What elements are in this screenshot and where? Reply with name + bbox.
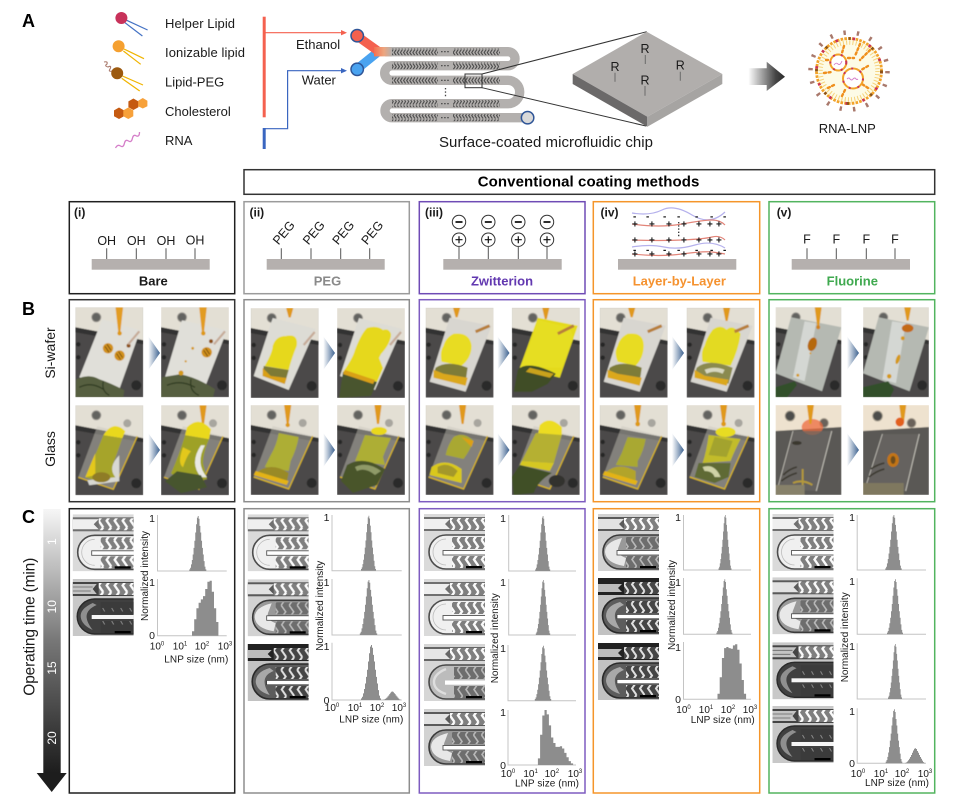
photo: PEG Si-wafer after <box>337 308 405 398</box>
axis numbers and labels: 2 <box>381 703 385 709</box>
panel letter B: B <box>22 299 35 319</box>
water label: Water <box>302 72 337 87</box>
axis numbers and labels <box>315 512 407 726</box>
axis numbers and labels: Normalized intensity <box>667 560 678 650</box>
axis numbers and labels: 1 <box>149 513 155 525</box>
photo: LbL Si-wafer before <box>600 308 668 398</box>
histogram 10 min <box>509 579 576 635</box>
photo: LbL Si-wafer after <box>687 308 755 398</box>
panel: v fluorine schematic: (v) <box>777 206 791 220</box>
component names: Cholesterol <box>165 104 231 119</box>
histogram 1 min <box>332 515 402 571</box>
axis numbers and labels: 10 <box>699 705 710 716</box>
operating time arrow: 1 <box>45 538 59 545</box>
panel: ii PEG schematic: PEG <box>300 218 328 247</box>
axis numbers and labels: 0 <box>324 695 330 707</box>
outlet <box>521 112 534 124</box>
operating time arrow: 10 <box>45 600 59 613</box>
microfluidic chip <box>351 30 534 124</box>
lipid components legend <box>104 12 245 148</box>
axis numbers and labels: 0 <box>336 703 340 709</box>
axis numbers and labels: 1 <box>849 641 855 653</box>
axis numbers and labels: 1 <box>675 512 681 524</box>
axis numbers and labels: Normalized intensity <box>840 592 851 682</box>
axis numbers and labels: 1 <box>849 706 855 718</box>
icon: ionizable lipid <box>113 40 144 64</box>
photo: PEG glass before <box>251 405 319 495</box>
photo: fluorine glass after <box>863 405 929 495</box>
axis numbers and labels: 1 <box>885 769 889 775</box>
photo: PEG Si-wafer before <box>251 308 319 398</box>
histogram 1 min <box>857 515 926 570</box>
header: conventional coating methods: Conventional coating methods <box>478 174 699 191</box>
ethanol label: Ethanol <box>296 37 340 52</box>
operating time arrow: 15 <box>45 661 59 675</box>
photo: fluorine Si-wafer after <box>863 307 929 397</box>
panel: v fluorine schematic: F <box>803 232 811 246</box>
arrow: before to after <box>672 336 684 467</box>
histogram 15 min <box>857 643 926 699</box>
panel: v fluorine schematic: F <box>832 232 840 246</box>
axis numbers and labels <box>667 512 758 726</box>
axis numbers and labels: 1 <box>500 643 506 655</box>
panel: ii PEG schematic <box>244 202 409 294</box>
panel: i bare schematic <box>69 202 235 294</box>
axis numbers and labels: 10 <box>918 769 929 780</box>
axis numbers and labels: 1 <box>359 703 363 709</box>
panel: iv layer-by-layer schematic: Layer-by-Layer <box>633 274 726 289</box>
panel: iv layer-by-layer schematic: +++++++ <box>632 220 722 230</box>
panel: iii zwitterion schematic <box>419 202 585 294</box>
component names: Lipid-PEG <box>165 74 224 90</box>
inlet: ethanol <box>351 30 363 42</box>
axis numbers and labels <box>490 513 583 790</box>
axis numbers and labels: 3 <box>754 705 758 711</box>
photo: LbL glass after <box>687 405 755 495</box>
operating time arrow <box>37 509 67 792</box>
axis numbers and labels: 10 <box>676 705 687 716</box>
flow lines to chip inlets <box>263 17 347 149</box>
panel: v fluorine schematic <box>769 202 935 294</box>
LNP caption: RNA-LNP <box>819 121 876 136</box>
RNA-LNP particle <box>810 32 888 110</box>
axis numbers and labels: 10 <box>370 703 381 714</box>
surface plate with R groups: R <box>676 58 685 72</box>
panel: iv layer-by-layer schematic <box>593 202 760 294</box>
panel: i bare schematic: OH <box>97 234 116 248</box>
component names <box>165 16 245 148</box>
panel: v fluorine schematic: Fluorine <box>827 274 878 289</box>
panel: v fluorine micrographs and size distributions <box>769 509 935 793</box>
panel: ii PEG schematic: (ii) <box>250 206 264 220</box>
arrow: before to after <box>148 336 160 467</box>
axis numbers and labels: 1 <box>675 642 681 654</box>
panel: ii PEG schematic: PEG <box>330 218 357 247</box>
panel: i bare schematic: OH <box>157 234 175 248</box>
axis numbers and labels: 1 <box>500 577 506 589</box>
panel: iii zwitterion droplet photos <box>419 300 585 502</box>
histogram 10 min <box>684 578 751 634</box>
histogram 20 min <box>508 710 576 765</box>
axis numbers and labels: 2 <box>906 769 910 775</box>
axis numbers and labels: 2 <box>732 705 736 711</box>
panel: iv layer-by-layer droplet photos <box>593 300 760 502</box>
surface plate with R groups: R <box>610 60 620 74</box>
surface plate with R groups: R <box>640 42 650 56</box>
panel: iv layer-by-layer schematic: ------- <box>633 212 726 222</box>
panel: iv layer-by-layer schematic: ------- <box>633 245 726 256</box>
histogram 1 min <box>684 515 751 570</box>
axis numbers and labels: 2 <box>556 769 560 775</box>
axis label: operating time: Operating time (min) <box>22 558 38 696</box>
axis numbers and labels: 10 <box>721 705 732 716</box>
photo: bare glass before <box>75 405 143 495</box>
photo: bare Si-wafer after <box>161 307 229 397</box>
chip caption: Surface-coated microfluidic chip <box>439 134 653 151</box>
axis numbers and labels: 10 <box>173 642 184 652</box>
arrow: before to after <box>323 336 335 467</box>
header: conventional coating methods <box>244 170 935 194</box>
axis numbers and labels: LNP size (nm) <box>691 715 755 726</box>
panel: i bare micrographs and size distributions <box>69 509 235 793</box>
axis numbers and labels: LNP size (nm) <box>164 654 228 665</box>
arrow: before to after <box>498 336 510 467</box>
icon: helper lipid <box>115 12 148 36</box>
axis numbers and labels: Normalized intensity <box>140 531 151 621</box>
surface plate with R groups: R <box>640 74 650 88</box>
axis numbers and labels: 1 <box>500 707 506 719</box>
histogram 20 min <box>684 642 751 699</box>
photo: fluorine Si-wafer before <box>776 307 841 397</box>
axis numbers and labels: 10 <box>523 769 534 780</box>
inlet: water <box>351 63 363 76</box>
axis numbers and labels: 10 <box>568 769 579 780</box>
axis numbers and labels: 0 <box>500 760 506 772</box>
axis numbers and labels: 10 <box>392 703 403 714</box>
axis numbers and labels: 1 <box>324 577 330 589</box>
axis numbers and labels <box>840 512 933 789</box>
axis numbers and labels: 3 <box>229 642 233 648</box>
surface plate with R groups <box>573 32 722 127</box>
photo: PEG glass after <box>337 405 405 495</box>
axis numbers and labels: 0 <box>687 705 691 711</box>
panel: ii PEG droplet photos <box>244 300 409 502</box>
panel: iv layer-by-layer schematic: (iv) <box>600 206 619 220</box>
panel letter A: A <box>22 11 35 31</box>
axis numbers and labels: 1 <box>849 576 855 588</box>
photo: zwitterion Si-wafer before <box>426 308 494 398</box>
axis numbers and labels: 10 <box>501 769 512 780</box>
axis numbers and labels: 1 <box>149 577 155 589</box>
axis numbers and labels: 10 <box>218 642 229 652</box>
panel: v fluorine droplet photos <box>769 300 935 502</box>
axis numbers and labels: 0 <box>675 694 681 706</box>
red ethanol line <box>263 17 347 117</box>
micrographs <box>73 514 135 636</box>
component names: Ionizable lipid <box>165 45 245 60</box>
axis numbers and labels: 10 <box>150 642 161 652</box>
panel: iv layer-by-layer schematic: +++++++ <box>632 250 722 260</box>
axis numbers and labels: 10 <box>851 769 862 780</box>
axis numbers and labels: 1 <box>534 769 538 775</box>
row label: Si-wafer: Si-wafer <box>42 327 58 379</box>
panel: ii PEG schematic: PEG <box>314 274 341 289</box>
axis numbers and labels: 10 <box>195 642 206 652</box>
micrographs <box>248 514 310 701</box>
panel: iv layer-by-layer schematic: +++++++ <box>632 236 722 246</box>
panel: ii PEG micrographs and size distributions <box>244 509 409 793</box>
panel: v fluorine schematic: F <box>862 232 870 246</box>
blue water line <box>263 68 347 149</box>
axis numbers and labels: 0 <box>849 758 855 770</box>
photo: fluorine glass before <box>776 405 841 495</box>
axis numbers and labels: 10 <box>545 769 556 780</box>
icon: lipid-PEG <box>104 62 143 91</box>
micrographs <box>772 514 834 763</box>
axis numbers and labels: 10 <box>895 769 906 780</box>
arrow: before to after <box>847 336 859 467</box>
micrographs <box>424 514 486 766</box>
panel letter C: C <box>22 507 35 527</box>
row label: Glass: Glass <box>42 431 58 467</box>
panel: i bare schematic: (i) <box>74 206 85 220</box>
arrow to LNP <box>748 62 785 91</box>
histogram 20 min <box>857 708 926 763</box>
axis numbers and labels: 1 <box>710 705 714 711</box>
operating time arrow: 20 <box>45 731 59 745</box>
axis numbers and labels: 0 <box>149 630 155 642</box>
axis numbers and labels: LNP size (nm) <box>339 715 403 726</box>
photo: LbL glass before <box>600 405 668 495</box>
axis numbers and labels: 10 <box>743 705 754 716</box>
axis numbers and labels: 10 <box>348 703 359 714</box>
axis numbers and labels: 3 <box>579 769 583 775</box>
panel: v fluorine schematic: F <box>891 232 899 246</box>
histogram 10 min <box>332 579 402 635</box>
axis numbers and labels: 10 <box>874 769 885 780</box>
axis numbers and labels: 0 <box>512 769 516 775</box>
axis numbers and labels: 1 <box>324 641 330 653</box>
component names: RNA <box>165 133 193 148</box>
histogram 1 min <box>158 515 227 571</box>
panel: i bare schematic: Bare <box>139 274 168 289</box>
panel: i bare droplet photos <box>69 300 235 502</box>
photo: zwitterion glass before <box>426 405 494 495</box>
zoom box <box>465 74 482 88</box>
axis numbers and labels: 10 <box>325 703 336 714</box>
photo: zwitterion Si-wafer after <box>512 308 580 398</box>
axis numbers and labels: Normalized intensity <box>490 593 501 683</box>
axis numbers and labels: 0 <box>161 642 165 648</box>
axis numbers and labels: 3 <box>403 703 407 709</box>
panel: i bare schematic: OH <box>127 234 146 248</box>
panel: iii zwitterion schematic: Zwitterion <box>471 274 533 289</box>
axis numbers and labels: 0 <box>862 769 866 775</box>
axis numbers and labels: 3 <box>929 769 933 775</box>
axis numbers and labels: 1 <box>184 642 188 648</box>
photo: zwitterion glass after <box>512 405 580 495</box>
axis numbers and labels: Normalized intensity <box>315 561 326 651</box>
axis numbers and labels: 1 <box>675 577 681 589</box>
histogram 10 min <box>158 579 227 636</box>
panel: i bare schematic: OH <box>186 234 204 248</box>
photo: bare Si-wafer before <box>75 307 143 397</box>
histogram 1 min <box>509 515 576 571</box>
panel: iii zwitterion schematic: (iii) <box>425 206 443 220</box>
icon: RNA strand <box>116 132 140 148</box>
panel: ii PEG schematic: PEG <box>359 218 386 247</box>
axis numbers and labels: LNP size (nm) <box>865 778 929 789</box>
axis numbers and labels: 1 <box>324 512 330 524</box>
icon: cholesterol <box>114 98 147 119</box>
axis numbers and labels: 2 <box>206 642 210 648</box>
panel: iv layer-by-layer micrographs and size distributions <box>593 509 760 793</box>
histogram 15 min <box>332 643 402 700</box>
axis numbers and labels <box>140 513 233 665</box>
axis numbers and labels: 1 <box>849 512 855 524</box>
panel: iii zwitterion micrographs and size distributions <box>419 509 585 793</box>
zoom lines to surface <box>482 32 647 126</box>
component names: Helper Lipid <box>165 16 235 31</box>
histogram 10 min <box>857 578 926 634</box>
panel: ii PEG schematic: PEG <box>270 218 298 247</box>
micrographs <box>598 514 660 700</box>
axis numbers and labels: LNP size (nm) <box>515 779 579 790</box>
axis numbers and labels: 1 <box>500 513 506 525</box>
photo: bare glass after <box>161 405 229 495</box>
histogram 15 min <box>508 645 576 701</box>
